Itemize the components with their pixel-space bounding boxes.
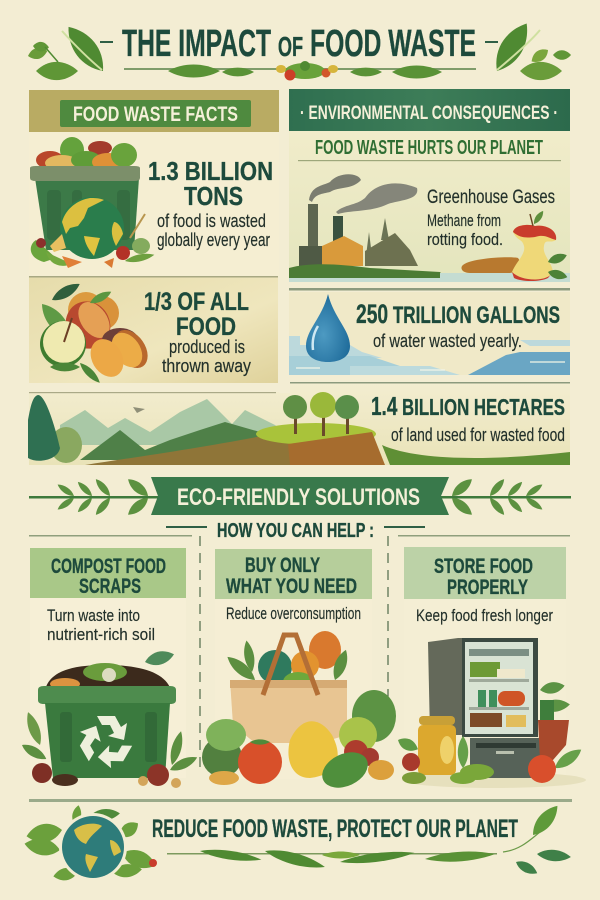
compost text: nutrient-rich soil bbox=[47, 625, 155, 644]
buy heading: BUY ONLY bbox=[245, 554, 320, 577]
text: water: of water wasted yearly. bbox=[373, 331, 522, 351]
text: one third: produced is bbox=[169, 337, 245, 357]
panel: greenhouse gases bbox=[289, 131, 570, 282]
title: THE IMPACT OF FOOD WASTE bbox=[122, 23, 476, 65]
compost text bbox=[47, 606, 155, 644]
icon: apple core bbox=[512, 209, 568, 281]
compost text: Turn waste into bbox=[47, 606, 140, 625]
environment header band bbox=[289, 89, 570, 131]
panel: store food properly bbox=[396, 547, 586, 788]
icon: fridge with jar and produce bbox=[396, 638, 586, 788]
text block: 1.3 billion tons: TONS bbox=[184, 181, 243, 211]
icon: shopping bag with vegetables bbox=[202, 631, 396, 795]
panel: land bbox=[28, 376, 570, 465]
section banner: eco-friendly solutions bbox=[29, 476, 571, 518]
text block: 1.3 billion tons: globally every year bbox=[157, 230, 270, 250]
panel: water bbox=[289, 288, 570, 375]
text: greenhouse gases: rotting food. bbox=[427, 230, 503, 249]
icon: footer globe with leaves bbox=[23, 805, 159, 882]
panel: environmental consequences bbox=[289, 89, 570, 131]
water strip bbox=[440, 273, 570, 282]
text block: 1.3 billion tons: of food is wasted bbox=[157, 211, 266, 231]
icon: right title leaves bbox=[488, 18, 571, 80]
vine divider bbox=[167, 846, 497, 873]
illustration: factory and smoke bbox=[289, 174, 445, 282]
text: greenhouse gases bbox=[427, 187, 555, 249]
panel: fact one background bbox=[29, 132, 279, 276]
store heading bbox=[434, 555, 533, 599]
icon: water drop bbox=[306, 294, 350, 362]
title vine divider bbox=[124, 61, 476, 80]
text block: 1.3 billion tons: 1.3 BILLION bbox=[148, 156, 273, 186]
panel: food waste facts bbox=[29, 90, 279, 132]
icon: bread bbox=[461, 257, 520, 273]
icon: compost bin bbox=[20, 648, 199, 788]
text block: 1.3 billion tons bbox=[148, 156, 273, 250]
panel: one third of food bbox=[29, 276, 278, 385]
panel: compost bbox=[20, 548, 199, 788]
facts header band bbox=[29, 90, 279, 132]
icon: bin with globe and food bbox=[30, 137, 155, 268]
text: greenhouse gases: Greenhouse Gases bbox=[427, 187, 555, 208]
tree group bbox=[283, 392, 359, 436]
text: one third: thrown away bbox=[162, 356, 251, 376]
recycling symbol bbox=[74, 716, 132, 772]
store heading: PROPERLY bbox=[447, 576, 528, 599]
text: one third: FOOD bbox=[176, 313, 236, 341]
text: one third: 1/3 OF ALL bbox=[144, 288, 249, 316]
section banner: eco-friendly solutions: ECO-FRIENDLY SOLUTIONS bbox=[177, 484, 420, 511]
facts heading: FOOD WASTE FACTS bbox=[73, 103, 238, 126]
icon: footer leaves right bbox=[503, 801, 571, 877]
text: land bbox=[371, 391, 565, 445]
buy heading: WHAT YOU NEED bbox=[226, 575, 357, 598]
footer rule bbox=[29, 799, 572, 802]
text: greenhouse gases: Methane from bbox=[427, 211, 501, 230]
compost heading bbox=[51, 555, 166, 598]
compost heading: SCRAPS bbox=[79, 575, 141, 598]
subheading: how you can help: HOW YOU CAN HELP : bbox=[217, 520, 374, 542]
illustration: landscape bbox=[28, 392, 570, 465]
compost heading: COMPOST FOOD bbox=[51, 555, 166, 578]
panel: buy only what you need bbox=[202, 549, 396, 795]
water waves bbox=[289, 336, 570, 375]
icon: left title leaves bbox=[27, 20, 112, 80]
buy text: Reduce overconsumption bbox=[226, 604, 361, 623]
icon: cut fruit bbox=[36, 279, 155, 385]
buy heading bbox=[226, 554, 357, 598]
text: one third bbox=[144, 288, 251, 376]
store text: Keep food fresh longer bbox=[416, 606, 553, 625]
text: water bbox=[356, 299, 560, 351]
store heading: STORE FOOD bbox=[434, 555, 533, 578]
